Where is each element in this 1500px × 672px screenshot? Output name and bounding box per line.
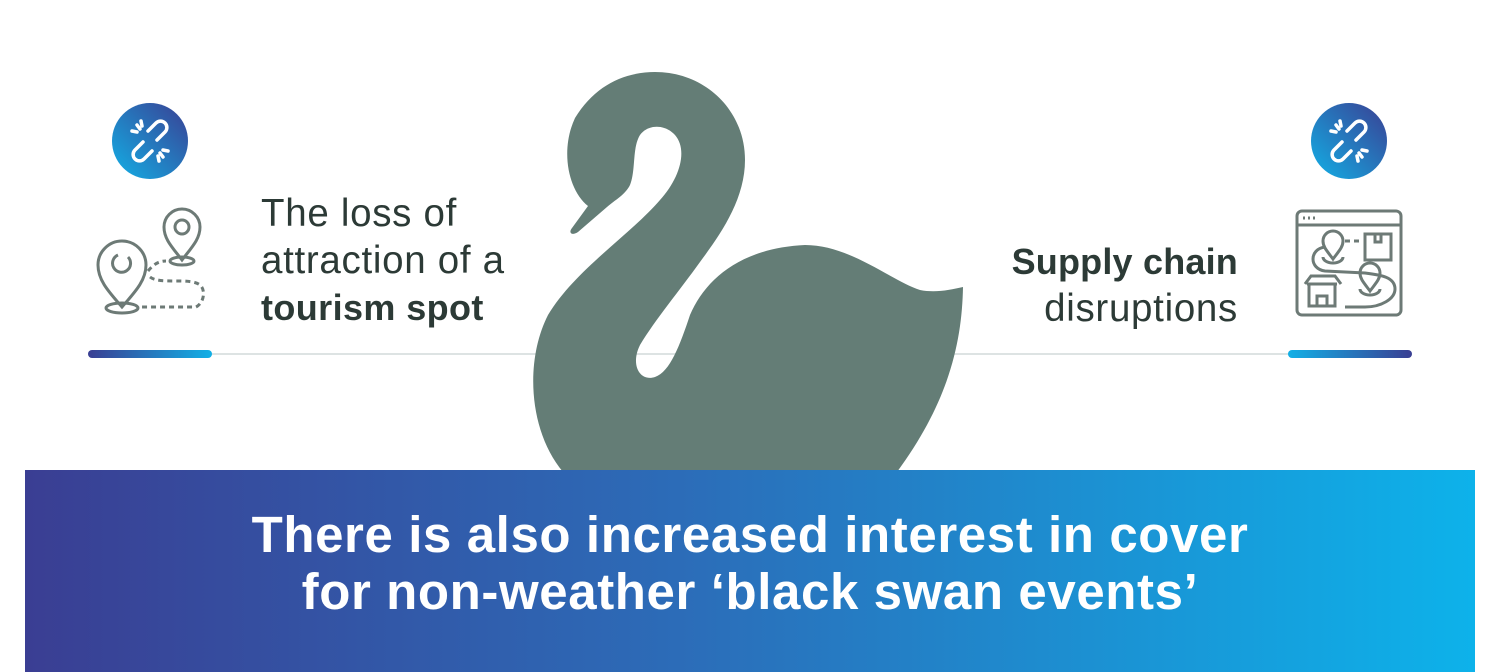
text: supply chain <box>1012 241 1238 330</box>
banner text <box>252 506 1248 620</box>
banner text: for non-weather ‘black swan events’ <box>302 563 1198 620</box>
icon: map pins route <box>96 208 205 314</box>
text: tourism spot <box>261 192 505 328</box>
icon: supply chain window <box>1296 210 1402 316</box>
icon: broken link right <box>1311 103 1387 179</box>
banner <box>25 470 1475 672</box>
text: tourism spot: tourism spot <box>261 287 484 328</box>
banner text: There is also increased interest in cover <box>252 506 1248 563</box>
icon: broken link left <box>112 103 188 179</box>
text: tourism spot: The loss of <box>261 192 457 235</box>
text: supply chain: disruptions <box>1044 287 1238 330</box>
text: tourism spot: attraction of a <box>261 239 505 282</box>
text: supply chain: Supply chain <box>1012 241 1238 282</box>
